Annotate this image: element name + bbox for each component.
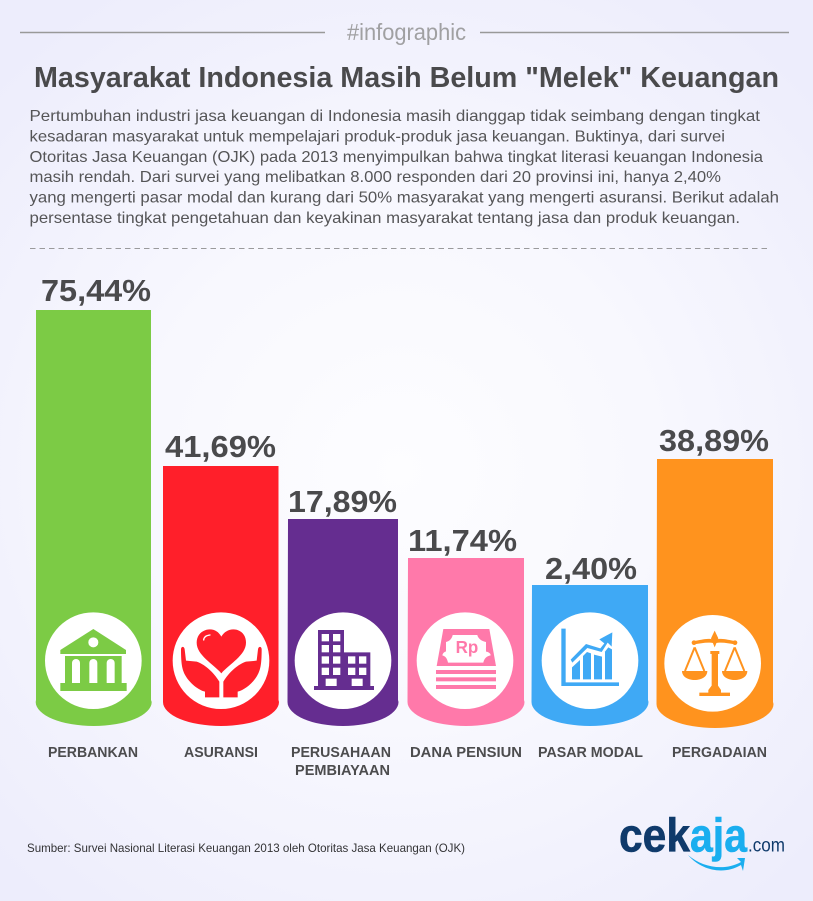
source note: Sumber: Survei Nasional Literasi Keuangan 2013 oleh Otoritas Jasa Keuangan (OJK)	[27, 841, 465, 855]
label: perbankan: PERBANKAN	[48, 745, 138, 761]
value: 38,89%: 38,89%	[659, 423, 769, 458]
hashtag label: #infographic	[347, 19, 466, 45]
icon: bank	[45, 612, 142, 709]
logo: cekaja.com: cek	[619, 808, 691, 862]
bar: asuransi	[163, 429, 279, 761]
bar: pasar modal	[532, 551, 648, 761]
title: Masyarakat Indonesia Masih Belum "Melek" Keuangan	[34, 62, 779, 94]
value: 17,89%: 17,89%	[288, 484, 397, 519]
bar: perbankan	[36, 273, 152, 761]
icon: stack of rupiah notes	[417, 612, 513, 709]
label: perusahaan pembiayaan: PERUSAHAAN	[291, 745, 391, 761]
label: pasar modal: PASAR MODAL	[538, 745, 643, 761]
bar: pergadaian	[656, 423, 774, 761]
icon: scales of justice	[664, 615, 761, 712]
icon: office buildings	[295, 612, 391, 709]
label: perusahaan pembiayaan	[291, 745, 391, 779]
intro paragraph: kesadaran masyarakat untuk mempelajari produk-produk jasa keuangan. Buktinya, dari survei	[30, 128, 725, 145]
intro paragraph	[30, 108, 779, 227]
logo: cekaja.com: aja	[690, 808, 748, 862]
label: pergadaian: PERGADAIAN	[672, 745, 767, 761]
value: 75,44%: 75,44%	[41, 273, 151, 308]
intro paragraph: masih rendah. Dari survei yang melibatkan 8.000 responden dari 20 provinsi ini, hanya 2,40%	[30, 169, 721, 186]
value: 41,69%: 41,69%	[165, 429, 276, 464]
bar: perusahaan pembiayaan	[288, 484, 398, 779]
bar: dana pensiun	[408, 523, 524, 761]
intro paragraph: Pertumbuhan industri jasa keuangan di Indonesia masih dianggap tidak seimbang dengan tingkat	[30, 108, 761, 125]
intro paragraph: persentase tingkat pengetahuan dan keyakinan masyarakat tentang jasa dan produk keuangan.	[30, 210, 740, 227]
icon: hands holding heart	[173, 612, 269, 709]
intro paragraph: yang mengerti pasar modal dan kurang dari 50% masyarakat yang mengerti asuransi. Berikut adalah	[30, 190, 779, 207]
logo swoosh arrow	[688, 855, 745, 871]
logo: cekaja.com	[619, 808, 785, 871]
value: 2,40%: 2,40%	[545, 551, 637, 586]
label: perusahaan pembiayaan: PEMBIAYAAN	[295, 763, 390, 779]
logo: cekaja.com: .com	[748, 836, 785, 856]
intro paragraph: Otoritas Jasa Keuangan (OJK) pada 2013 menyimpulkan bahwa tingkat literasi keuangan Indonesia	[30, 149, 763, 166]
label: asuransi: ASURANSI	[184, 745, 258, 761]
icon: stack of rupiah notes: Rp	[456, 637, 478, 657]
icon: rising chart	[542, 612, 638, 709]
value: 11,74%: 11,74%	[408, 523, 517, 558]
label: dana pensiun: DANA PENSIUN	[410, 745, 522, 761]
